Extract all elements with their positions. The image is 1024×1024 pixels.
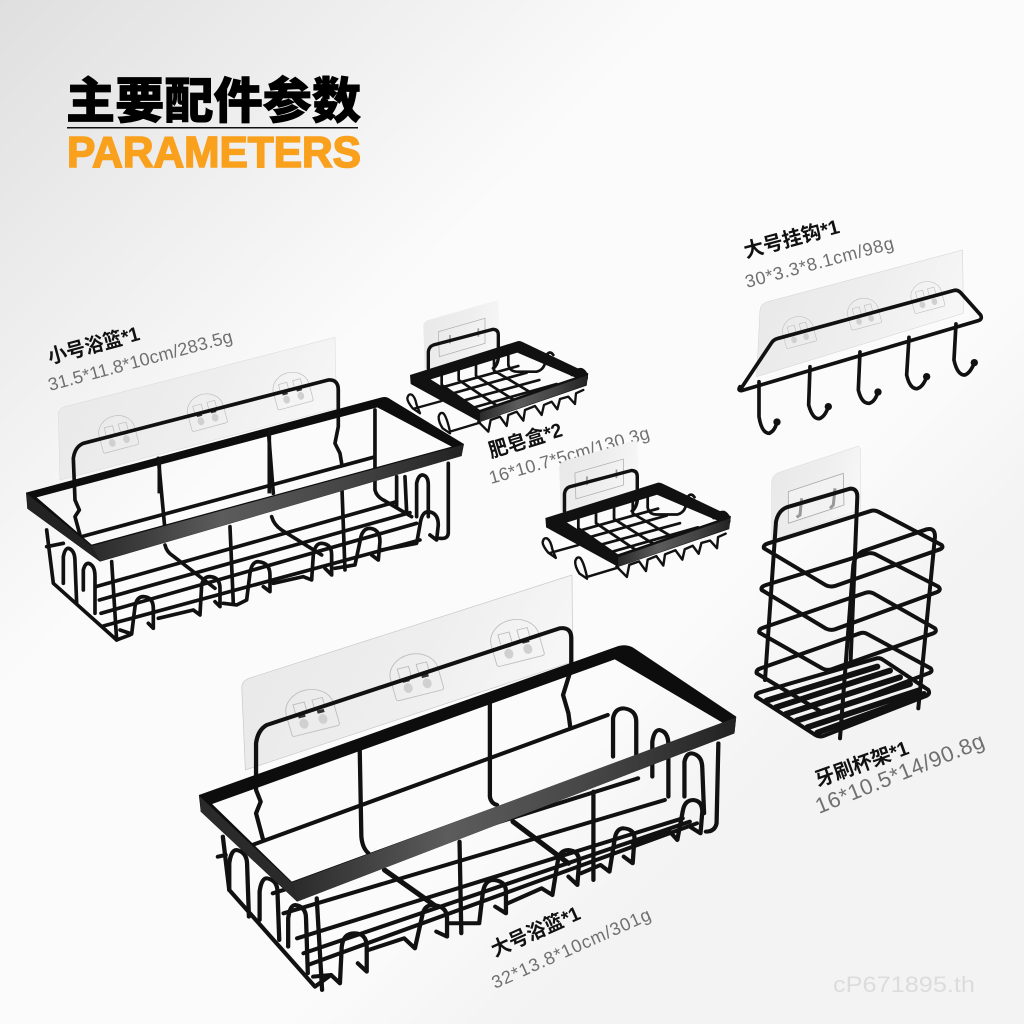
wire frame — [218, 628, 718, 990]
label: toothbrush cup holder: 16*10.5*14/90.8g — [812, 728, 988, 819]
adhesive plate — [58, 337, 337, 480]
adhesive plate — [772, 446, 861, 540]
watermark: cP671895.th — [833, 972, 975, 997]
product: large hook rack — [739, 250, 981, 433]
hook rail and five hooks — [739, 290, 981, 433]
label: soap dish: 16*10.7*5cm/130.3g — [487, 423, 652, 488]
wire frame — [47, 380, 448, 640]
suction hooks — [95, 368, 313, 454]
metal rim — [26, 397, 464, 562]
hook end caps — [773, 359, 978, 426]
label: large hook rack: 大号挂钩*1 — [741, 215, 842, 263]
suction hook — [788, 473, 844, 523]
product: toothbrush cup holder — [756, 446, 943, 738]
product: large shower basket — [199, 575, 736, 990]
label: large shower basket: 32*13.8*10cm/301g — [488, 904, 654, 993]
title: English heading: PARAMETERS — [67, 128, 361, 177]
label: toothbrush cup holder: 牙刷杯架*1 — [812, 737, 912, 792]
product: soap dish lower — [543, 440, 731, 579]
label: large shower basket: 大号浴篮*1 — [488, 902, 584, 962]
title block — [66, 62, 361, 177]
metal rim — [199, 645, 736, 902]
label: large hook rack: 30*3.3*8.1cm/98g — [743, 233, 896, 292]
title rule — [67, 127, 358, 128]
adhesive plate — [757, 250, 963, 377]
wire frame — [756, 489, 943, 738]
label: soap dish: 肥皂盒*2 — [485, 418, 565, 463]
label: small shower basket: 小号浴篮*1 — [45, 322, 142, 369]
title: Chinese heading: 主要配件参数 — [66, 62, 361, 133]
product: small shower basket — [26, 337, 464, 640]
product: soap dish upper — [407, 300, 588, 433]
label: small shower basket: 31.5*11.8*10cm/283.5g — [46, 326, 235, 395]
suction hooks — [281, 614, 545, 737]
suction hooks — [779, 278, 945, 349]
adhesive plate — [242, 575, 573, 770]
